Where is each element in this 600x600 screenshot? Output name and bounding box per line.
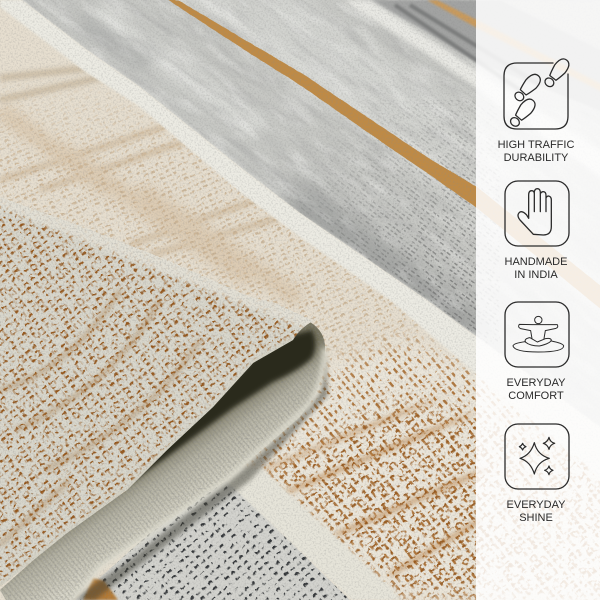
label: handmade in india: IN INDIA — [514, 269, 558, 281]
small gold patch — [83, 578, 118, 600]
label: everyday comfort: COMFORT — [508, 390, 564, 402]
upper white band top right — [342, 0, 600, 250]
underside rim — [73, 348, 325, 600]
thin gold stripe top right — [427, 0, 600, 142]
footprint lower — [507, 96, 538, 129]
gold stripe — [168, 0, 600, 390]
dark inner cavity — [60, 330, 316, 533]
white feature sidebar — [476, 0, 600, 600]
dark grey stripe top right — [370, 0, 600, 150]
icon: meditating figure — [505, 302, 569, 367]
label: everyday comfort: EVERYDAY — [507, 377, 566, 389]
woven top surface — [0, 198, 310, 587]
footprint middle — [512, 71, 543, 104]
lower white stripe — [227, 468, 402, 600]
shadow below fold — [70, 345, 328, 600]
icon: footprints — [504, 56, 572, 129]
underside of fold — [0, 322, 325, 600]
label: everyday shine: SHINE — [519, 512, 553, 524]
label: high traffic durability: DURABILITY — [504, 152, 569, 164]
label: high traffic durability: HIGH TRAFFIC — [498, 139, 574, 151]
label: everyday shine: EVERYDAY — [507, 499, 566, 511]
underside rib texture — [0, 320, 330, 600]
lower grey field — [77, 482, 350, 600]
icon: sparkles — [505, 424, 569, 489]
folded rug corner — [0, 198, 331, 600]
footprint top right — [542, 56, 572, 89]
label: handmade in india: HANDMADE — [505, 256, 567, 268]
orange dashes lower right field — [246, 326, 600, 600]
icon: hand — [505, 181, 569, 246]
grey wool band — [22, 0, 500, 344]
